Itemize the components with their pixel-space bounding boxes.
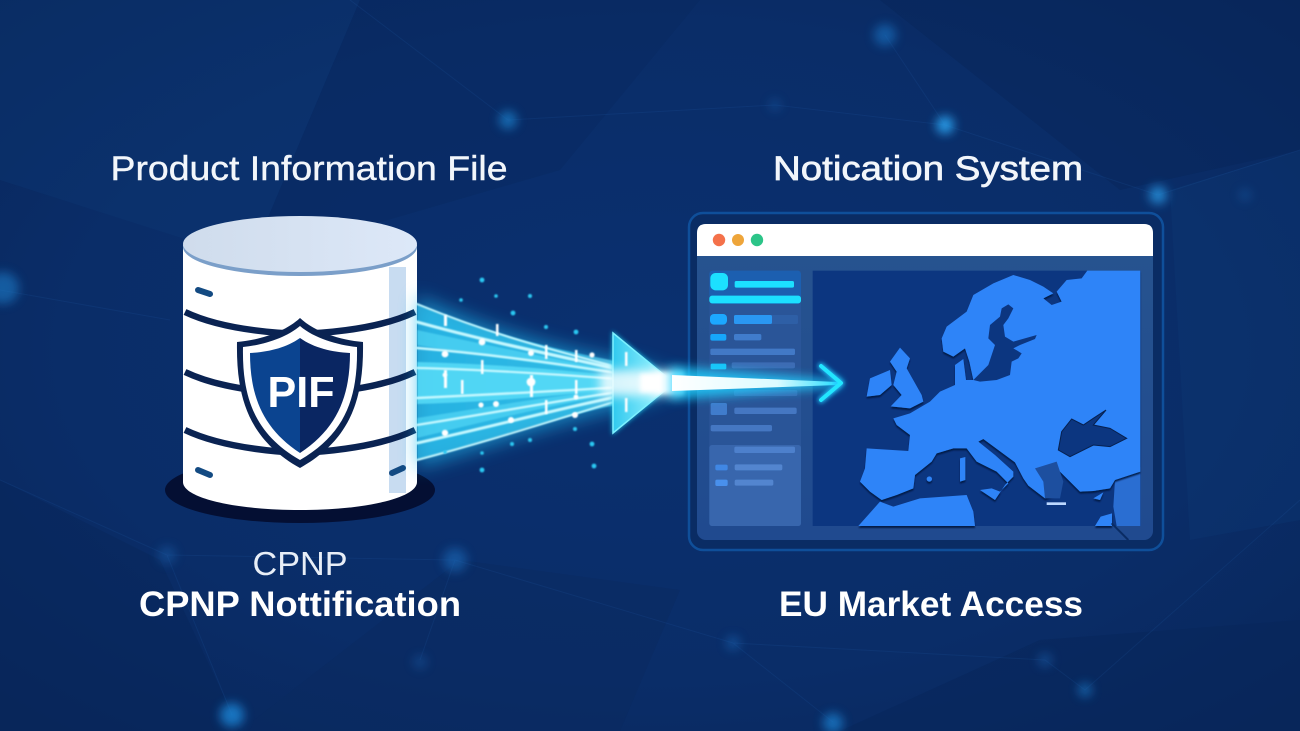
stream lines xyxy=(417,304,670,460)
label: CPNP Nottification: CPNP Nottification xyxy=(139,585,461,624)
shield label PIF: PIF xyxy=(268,368,334,417)
cylinder ground shadow xyxy=(165,457,435,523)
cylinder top xyxy=(183,218,417,276)
band lines xyxy=(185,312,415,453)
stream hot core xyxy=(600,370,680,396)
island: Cyprus xyxy=(1093,492,1103,500)
Middle East land xyxy=(1113,467,1140,526)
outer frame xyxy=(689,213,1163,550)
beam xyxy=(672,375,838,391)
side highlight stripe xyxy=(389,267,406,493)
icon: small arrow tip xyxy=(821,366,841,400)
data flow stream xyxy=(417,278,841,472)
Aegean sea xyxy=(1035,462,1063,498)
outer sparks xyxy=(443,278,596,472)
icon: small arrow tip glow xyxy=(821,366,841,400)
screen xyxy=(697,224,1153,540)
server slots xyxy=(198,290,403,475)
cylinder body xyxy=(183,245,417,510)
map panel corner notch xyxy=(1112,523,1128,540)
sidebar xyxy=(709,271,801,526)
Black sea xyxy=(1058,410,1127,457)
heading: Product Information File: Product Information File xyxy=(110,150,508,188)
island: Sardinia and Corsica xyxy=(960,457,965,482)
shield xyxy=(237,318,363,468)
label: CPNP: CPNP xyxy=(252,545,348,582)
arrowhead xyxy=(612,331,675,435)
icon: PIF database cylinder xyxy=(165,216,435,523)
island: Balearics xyxy=(927,476,932,482)
heading: Notication System: Notication System xyxy=(773,150,1083,188)
stream body xyxy=(417,304,680,460)
map panel of Europe xyxy=(813,271,1141,540)
stream glow xyxy=(417,296,695,468)
window controls xyxy=(713,234,763,246)
label: EU Market Access: EU Market Access xyxy=(779,585,1083,624)
island: Ireland xyxy=(867,370,892,397)
Egypt coast xyxy=(1095,513,1112,526)
browser window xyxy=(689,213,1163,550)
north Africa xyxy=(858,495,975,526)
island: Great Britain xyxy=(890,348,923,408)
Crete xyxy=(1047,502,1066,505)
title bar xyxy=(697,224,1153,256)
particles xyxy=(442,315,628,436)
beam glow xyxy=(670,366,840,400)
Baltic sea xyxy=(973,304,1037,382)
Europe land xyxy=(858,271,1140,526)
